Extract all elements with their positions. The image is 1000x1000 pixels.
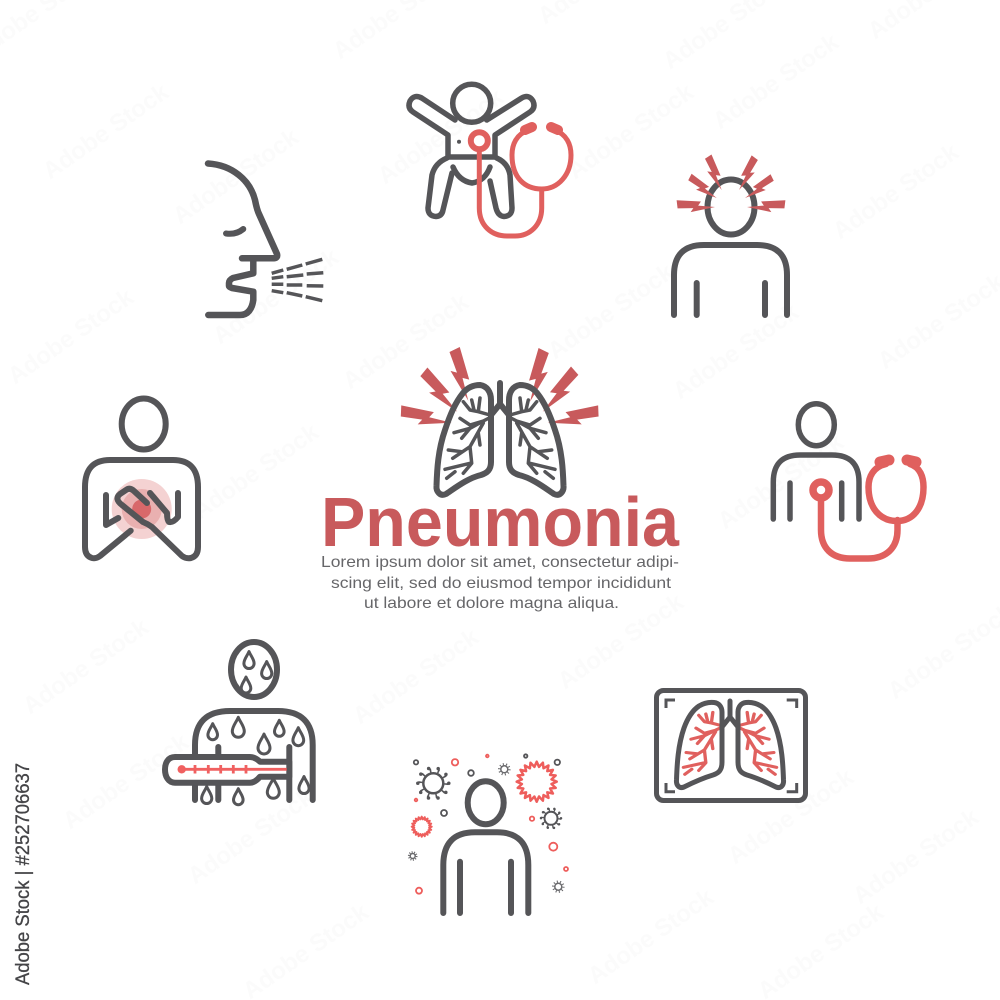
- red bronchi: [683, 712, 777, 774]
- text: Adobe Stock: [543, 258, 679, 365]
- face profile: [208, 164, 277, 315]
- pain bolts right: [524, 348, 601, 432]
- text: Adobe Stock: [373, 83, 509, 190]
- title: Pneumonia: [321, 483, 680, 561]
- text: Adobe Stock: [668, 298, 804, 405]
- icon: sweating person with thermometer: [165, 642, 313, 805]
- cough spray: [272, 259, 323, 301]
- lungs outline: [676, 701, 784, 788]
- icon: doctor stethoscope on person: [773, 404, 924, 558]
- icon: coughing face: [208, 164, 323, 315]
- person figure: [443, 781, 528, 913]
- closed eye: [226, 229, 243, 234]
- person figure: [773, 404, 859, 519]
- x-ray frame: [656, 690, 806, 800]
- icon: chest x-ray: [656, 690, 806, 800]
- text: Adobe Stock: [828, 138, 964, 245]
- icon: headache person: [674, 154, 787, 315]
- thermometer: [165, 757, 289, 783]
- text block: description: [321, 554, 679, 612]
- pain bolts left: [398, 347, 474, 432]
- text: Adobe Stock: [58, 728, 194, 835]
- text: Adobe Stock: [18, 613, 154, 720]
- trachea: [491, 383, 509, 415]
- icon: person surrounded by viruses: [409, 754, 568, 913]
- person figure: [195, 642, 313, 800]
- text block: description: Lorem ipsum dolor sit amet, consectetur adipi-: [321, 554, 679, 571]
- text block: description: scing elit, sed do eiusmod tempor incididunt: [331, 575, 672, 592]
- dark virus medium: [541, 808, 561, 828]
- text: Adobe Stock: [848, 803, 984, 910]
- baby figure: [409, 84, 534, 216]
- corner marks: [666, 700, 797, 792]
- small gray viruses: [409, 764, 563, 892]
- text: Adobe Stock: [38, 78, 174, 185]
- red stethoscope: [813, 460, 924, 558]
- dark rings: [414, 754, 560, 816]
- text: Adobe Stock: [553, 588, 689, 695]
- text: Adobe Stock: [563, 78, 699, 185]
- icon: central lungs with pain bolts: [398, 347, 601, 495]
- text: Adobe Stock: [713, 428, 849, 535]
- credit: stock id: Adobe Stock | #252706637: [13, 763, 34, 985]
- text: Adobe Stock: [708, 28, 844, 135]
- lower drops: [202, 776, 309, 805]
- pain bolts: [676, 154, 786, 214]
- large red virus: [517, 762, 557, 802]
- red rings: [415, 755, 568, 894]
- icon: baby with stethoscope: [409, 84, 571, 236]
- person with hands on chest: [85, 398, 198, 558]
- text: Adobe Stock: [338, 288, 474, 395]
- text: Adobe Stock: [3, 283, 139, 390]
- dark virus large: [418, 768, 449, 799]
- sweat drops: [208, 652, 304, 754]
- icon: chest pain person: [85, 398, 198, 558]
- pain circles: [112, 479, 172, 539]
- text: Adobe Stock: [583, 883, 719, 990]
- red stethoscope: [471, 127, 571, 236]
- left lung: [436, 385, 491, 495]
- person figure: [674, 180, 787, 315]
- text: Adobe Stock: [348, 623, 484, 730]
- small red virus: [412, 817, 432, 837]
- text: Adobe Stock: [188, 418, 324, 525]
- text: Adobe Stock: [723, 763, 859, 870]
- right lung: [509, 385, 564, 495]
- text block: description: ut labore et dolore magna aliqua.: [364, 595, 619, 612]
- text: Adobe Stock: [183, 783, 319, 890]
- text: Adobe Stock: [168, 123, 304, 230]
- text: Adobe Stock: [208, 243, 344, 350]
